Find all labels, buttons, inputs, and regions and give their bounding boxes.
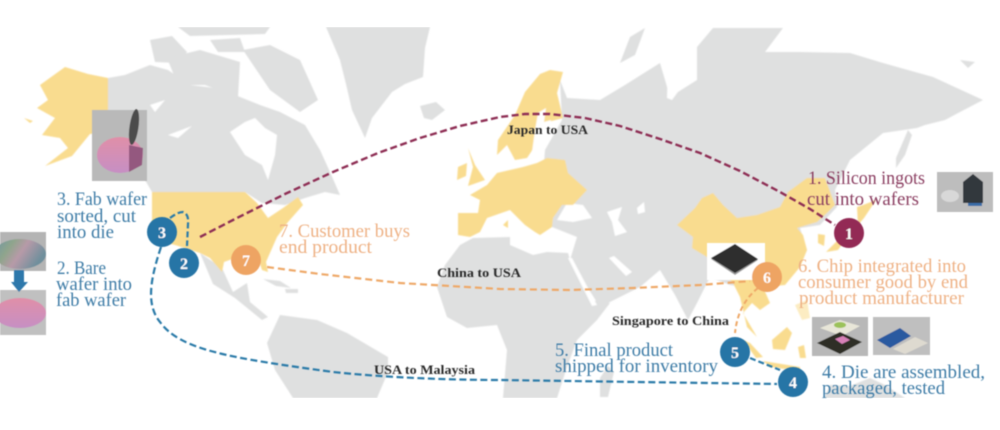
step 7 marker (231, 245, 261, 275)
label: Singapore to China: Singapore to China (612, 314, 730, 328)
text: step 3 (57, 190, 147, 243)
Black Sea (557, 203, 592, 222)
Caribbean (263, 279, 291, 288)
step 6 marker (752, 262, 782, 292)
Caspian and Aral seas (607, 207, 627, 236)
Sumatra (743, 340, 763, 358)
step 5 marker: 5 (731, 345, 739, 362)
Central America (200, 253, 268, 320)
text: step 4: packaged, tested (822, 379, 946, 399)
text: step 5 (555, 341, 719, 377)
label: China to USA: China to USA (437, 266, 521, 280)
image: silicon ingot (937, 172, 993, 212)
Java strip (763, 361, 800, 371)
text: step 6: 6. Chip integrated into (798, 257, 966, 277)
white Baltic gulf (532, 108, 551, 152)
step 4 marker: 4 (789, 375, 797, 392)
text: step 2: 2. Bare (57, 259, 106, 279)
text: step 2: wafer into (56, 275, 132, 295)
Ireland (457, 163, 467, 180)
Korea (818, 234, 825, 246)
Iceland (420, 102, 445, 120)
Eurasia (540, 28, 983, 320)
white water bodies (150, 90, 677, 306)
image: package exploded (812, 317, 868, 356)
text: step 5: 5. Final product (555, 341, 674, 361)
text: step 1 (807, 169, 925, 210)
step 4 marker (778, 367, 808, 397)
step circles (147, 217, 864, 397)
Canada (108, 65, 340, 205)
image: chip (707, 243, 765, 280)
text: step 2: fab wafer (56, 291, 126, 311)
Kamchatka strip (960, 60, 975, 68)
Novaya Zemlya (620, 28, 645, 63)
label: Japan to USA: Japan to USA (507, 123, 588, 137)
Hudson Bay (230, 118, 277, 180)
step 2 marker: 2 (180, 256, 188, 273)
continental Europe (458, 158, 587, 237)
step 5 marker (720, 337, 750, 367)
text: step 6 (798, 257, 969, 309)
text: step 6: product manufacturer (799, 289, 964, 309)
Greenland (326, 27, 430, 138)
step 7 marker: 7 (242, 253, 250, 270)
USA (152, 192, 303, 272)
Persian Gulf (609, 256, 632, 276)
route: USA to Malaysia (151, 247, 777, 384)
text: step 3: into die (57, 223, 114, 243)
route: Singapore to China (735, 288, 758, 333)
text: step 1: 1. Silicon ingots (808, 169, 925, 189)
Arctic islands (150, 36, 187, 63)
route: fab to sort (170, 212, 188, 246)
yellow countries (24, 67, 876, 371)
text: step 6: consumer good by end (798, 273, 969, 293)
grey land masses (108, 27, 983, 398)
Australia (824, 378, 905, 398)
Japan (826, 240, 842, 253)
Philippines (795, 300, 810, 320)
Borneo (772, 327, 792, 350)
Africa (437, 237, 610, 398)
Sicily (503, 220, 508, 228)
image: wafer sort saw (92, 109, 147, 181)
label: USA to Malaysia: USA to Malaysia (374, 363, 476, 377)
icon: down arrow (11, 270, 28, 292)
route: Japan to USA (200, 114, 835, 237)
step 6 marker: 6 (763, 270, 771, 287)
Red Sea (568, 258, 597, 306)
UK (468, 148, 485, 186)
text: step 3: 3. Fab wafer (57, 190, 147, 210)
text: step 3: sorted, cut (57, 207, 137, 227)
China and SE Asia mainland (677, 178, 835, 337)
Scandinavia (497, 70, 563, 160)
Sakhalin (896, 130, 912, 168)
text: step 2 (56, 259, 132, 311)
Sulawesi (798, 345, 806, 358)
step 3 marker: 3 (158, 225, 166, 242)
text: step 7: end product (279, 238, 373, 258)
image: package test (873, 317, 930, 355)
step 1 marker: 1 (845, 226, 853, 243)
text: step 5: shipped for inventory (555, 357, 719, 377)
Alaska (37, 67, 108, 166)
image: bare wafer to fab wafer (0, 232, 46, 335)
text: step 7 (279, 222, 410, 258)
step 3 marker (147, 217, 177, 247)
text: step 7: 7. Customer buys (279, 222, 410, 242)
text: step 1: cut into wafers (807, 190, 919, 210)
route: assembly to final product (750, 358, 780, 370)
text: step 4: 4. Die are assembled, (822, 363, 985, 383)
Siberian inlet (666, 90, 677, 100)
route: China to USA (267, 267, 750, 290)
step 2 marker (169, 248, 199, 278)
step 1 marker (834, 218, 864, 248)
text: step 4 (822, 363, 985, 399)
South America (267, 315, 388, 398)
